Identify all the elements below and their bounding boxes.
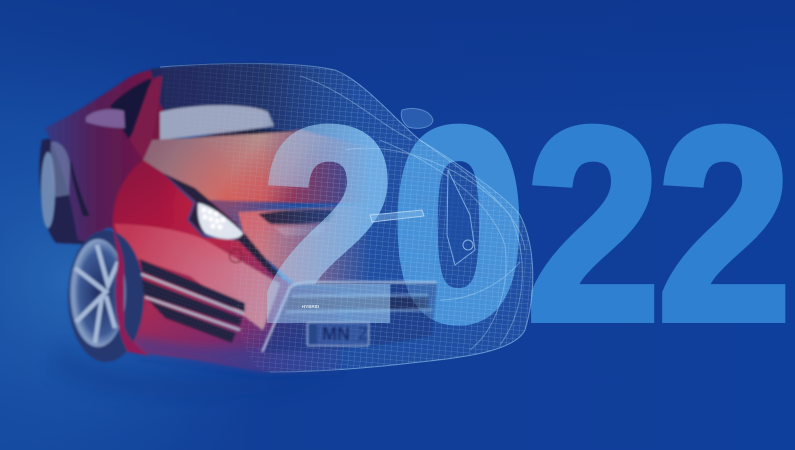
wireframe mesh lines <box>150 60 545 380</box>
upper grille slot <box>140 259 245 312</box>
front wheel rim <box>70 239 126 347</box>
translucent overlay digit: 2: 2 <box>262 71 396 377</box>
wiper <box>187 129 300 138</box>
front grille <box>262 282 437 352</box>
wheel spokes <box>75 245 118 343</box>
wireframe car body <box>160 64 533 372</box>
number plate <box>307 322 369 346</box>
red headlight glow <box>170 140 290 253</box>
wireframe headlight <box>447 170 475 265</box>
nose panel right of headlight <box>237 206 366 286</box>
year digits solid: 2022: 2022 <box>262 71 791 377</box>
rear window <box>110 78 152 139</box>
plate text: MN Z <box>322 324 369 344</box>
wing mirror <box>86 109 125 128</box>
bumper edge over wheel <box>113 228 150 356</box>
front wheel tyre <box>68 230 144 362</box>
fender reflection <box>114 224 280 330</box>
bumper lower blue fade <box>130 335 340 372</box>
roof and windshield <box>148 62 350 140</box>
seats and interior <box>160 105 274 140</box>
lower grille slot <box>148 300 236 343</box>
headlight trim <box>163 173 282 278</box>
headlight lens <box>198 203 243 239</box>
red car, fades into wireframe <box>39 64 385 372</box>
rear wheel <box>38 138 86 246</box>
led cluster <box>201 207 226 230</box>
grille bars <box>141 274 244 330</box>
translucent overlay digit: 0: 0 <box>392 71 526 377</box>
rear body and door <box>45 69 170 243</box>
rear side vent <box>70 160 90 216</box>
front fender and bumper <box>113 160 340 372</box>
hybrid badge: HYBRID <box>302 304 320 309</box>
a-pillar <box>130 76 162 160</box>
washer ring <box>230 250 242 262</box>
hood <box>143 130 380 204</box>
hood vent <box>258 209 335 225</box>
rear wheel rim <box>41 152 55 228</box>
middle grille slot <box>142 279 242 326</box>
icon: wing mirror wireframe <box>401 108 433 128</box>
